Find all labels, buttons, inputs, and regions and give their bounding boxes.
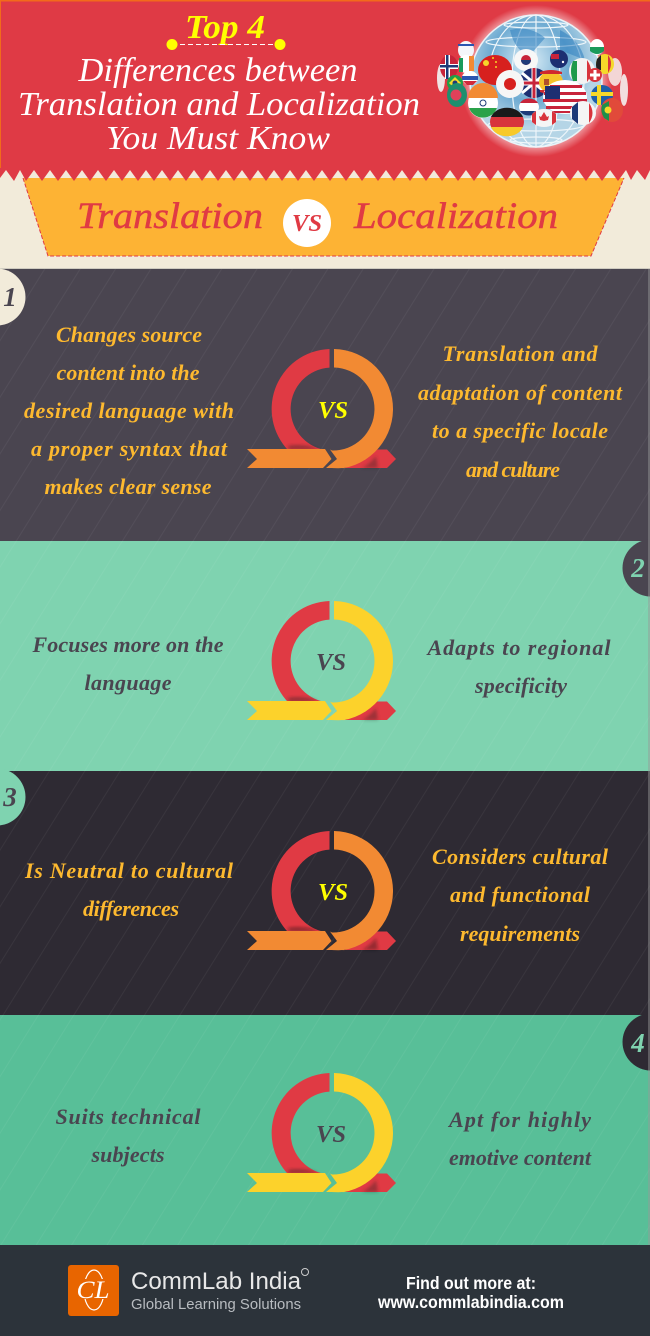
title: Differences between <box>77 52 357 89</box>
localization text 2: Adapts to regional <box>426 635 611 660</box>
localization text 3: requirements <box>460 921 580 946</box>
number badge 2 <box>622 540 650 596</box>
translation text 4: Suits technical <box>56 1104 201 1129</box>
side bubbles <box>437 64 445 92</box>
number badge 1 <box>0 268 26 326</box>
vs ring 4 <box>247 1073 396 1193</box>
translation text 4: subjects <box>90 1142 164 1167</box>
translation text 3: Is Neutral to cultural <box>24 858 234 883</box>
translation text 1: Changes source <box>56 322 202 347</box>
number badge 2: 2 <box>630 553 645 583</box>
translation text 1: a proper syntax that <box>31 436 228 461</box>
localization text 3: Considers cultural <box>432 844 609 869</box>
logo: Global Learning Solutions <box>131 1297 301 1313</box>
call to action: Find out more at: <box>406 1273 536 1293</box>
vs ring 3 <box>247 831 396 951</box>
title: You Must Know <box>106 120 330 157</box>
icon: globe with flag speech bubbles <box>437 5 628 157</box>
call to action: www.commlabindia.com <box>377 1292 564 1312</box>
vs badge <box>283 199 331 247</box>
localization text 2 <box>426 635 611 698</box>
localization text 4 <box>447 1107 592 1170</box>
top 4 heading <box>166 9 286 50</box>
localization text 3 <box>432 844 609 946</box>
translation text 2: language <box>84 670 172 695</box>
localization text 1: adaptation of content <box>418 380 623 405</box>
call to action <box>377 1273 564 1312</box>
number badge 3 <box>0 768 26 826</box>
translation text 3: differences <box>83 896 179 921</box>
translation text 1 <box>24 322 234 499</box>
localization text 2: specificity <box>474 673 567 698</box>
localization text 4: emotive content <box>449 1145 592 1170</box>
header panel <box>0 0 650 182</box>
vs ring 1 <box>247 349 396 469</box>
number badge 4 <box>622 1014 650 1070</box>
translation text 1: desired language with <box>24 398 234 423</box>
panel 4 <box>0 1014 650 1245</box>
banner label: Translation: Translation <box>77 196 263 237</box>
beige band with banner <box>0 168 650 270</box>
localization text 3: and functional <box>450 882 591 907</box>
panel 1 <box>0 268 650 541</box>
top 4 heading: Top 4 <box>185 9 265 46</box>
vs badge: VS <box>292 211 322 237</box>
localization text 1: Translation and <box>442 341 598 366</box>
localization text 1: and culture <box>466 457 560 482</box>
title: Translation and Localization <box>18 86 420 123</box>
number badge 4: 4 <box>630 1028 645 1058</box>
vs ring 2: VS <box>316 650 346 676</box>
localization text 1: to a specific locale <box>432 418 608 443</box>
logo <box>68 1265 308 1316</box>
translation text 3 <box>24 858 234 921</box>
logo: CL <box>76 1277 110 1304</box>
vs ring 3: VS <box>318 880 348 906</box>
translation text 2: Focuses more on the <box>32 632 224 657</box>
translation text 1: content into the <box>56 360 200 385</box>
vs ring 4: VS <box>316 1122 346 1148</box>
translation text 1: makes clear sense <box>44 474 212 499</box>
panel 2 <box>0 540 650 771</box>
banner label: Localization: Localization <box>353 196 558 237</box>
panel 3 <box>0 768 650 1015</box>
number badge 3: 3 <box>2 782 17 812</box>
number badge 1: 1 <box>3 282 17 312</box>
footer <box>0 1245 650 1336</box>
logo: CommLab India <box>131 1268 302 1295</box>
vs ring 1: VS <box>318 398 348 424</box>
translation text 2 <box>32 632 224 695</box>
localization text 1 <box>418 341 623 482</box>
banner ribbon <box>23 178 624 256</box>
title <box>18 52 420 157</box>
vs ring 2 <box>247 601 396 721</box>
localization text 4: Apt for highly <box>447 1107 591 1132</box>
translation text 4 <box>56 1104 201 1167</box>
zigzag edge <box>0 168 650 181</box>
